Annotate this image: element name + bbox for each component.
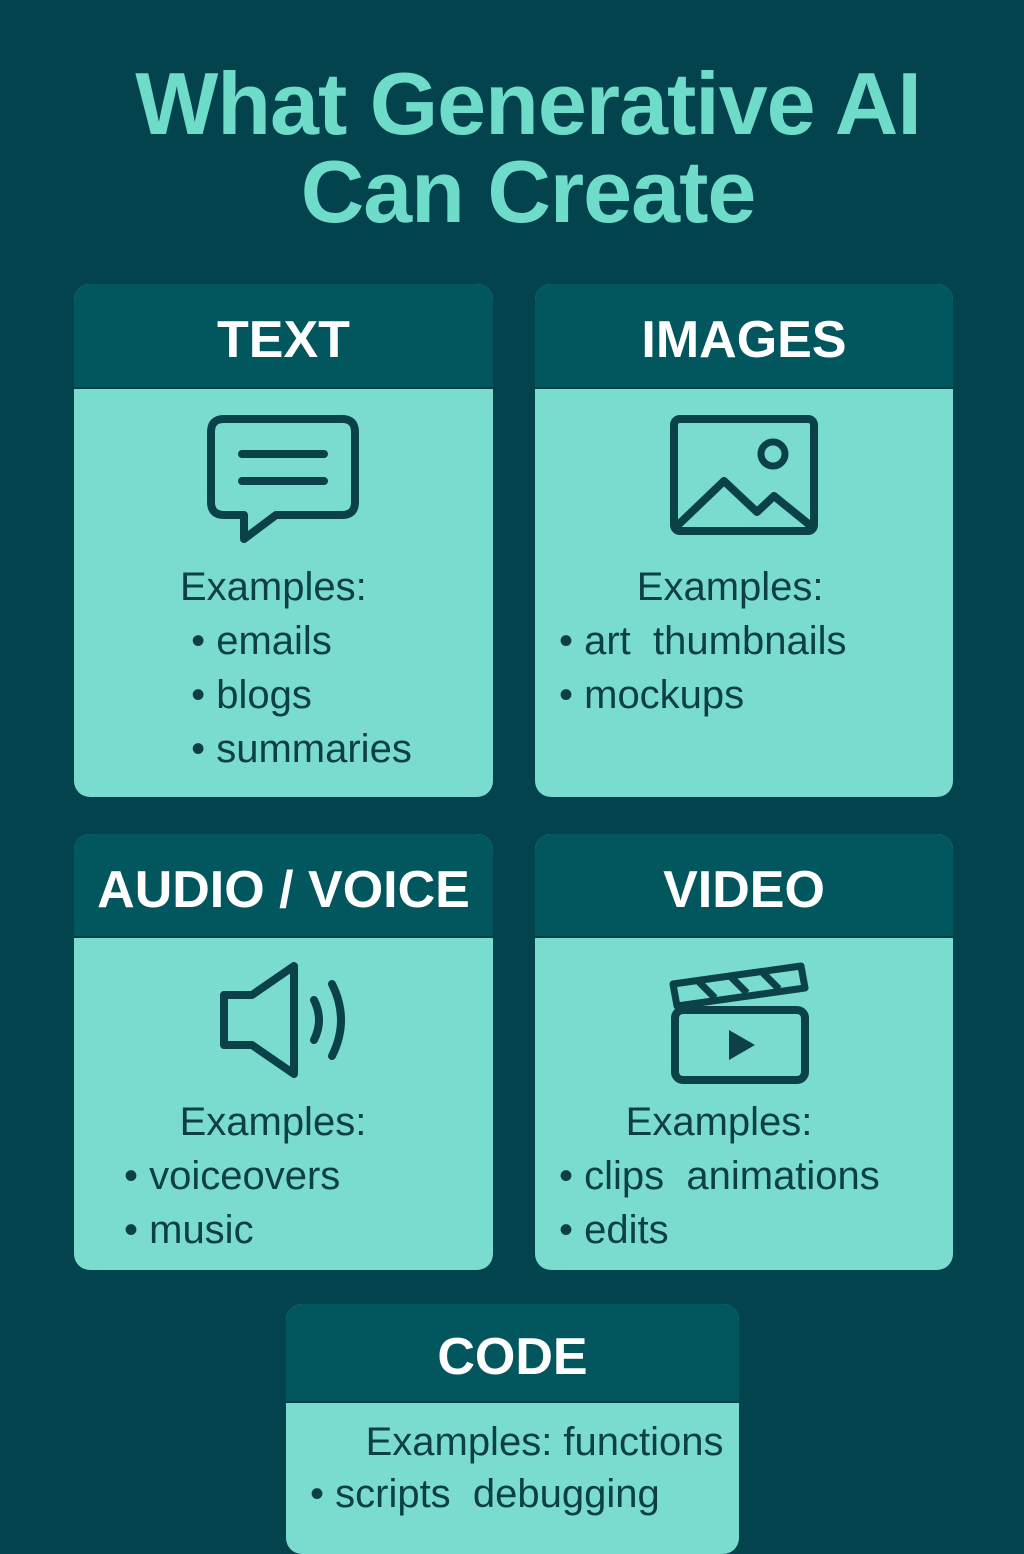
heading: images: IMAGES (641, 311, 847, 369)
icon: chat bubble (207, 415, 359, 543)
heading: audio (74, 834, 493, 938)
text block: examples: • voiceovers (124, 1154, 340, 1198)
panel: video (535, 834, 953, 1270)
heading: text: TEXT (217, 311, 350, 369)
text block: examples: • mockups (559, 673, 744, 717)
panel: code (286, 1304, 739, 1554)
heading: code (286, 1304, 739, 1403)
text block: examples: • blogs (191, 673, 312, 717)
text block: examples: • emails (191, 619, 332, 663)
text block: examples: • clips animations (559, 1154, 880, 1198)
text block: examples: Examples: (180, 565, 367, 609)
text block: examples: Examples: (180, 1100, 366, 1144)
heading: code: CODE (437, 1328, 588, 1386)
text block: examples: Examples: functions (366, 1420, 724, 1464)
title: Can Create (301, 142, 755, 241)
text block: examples (559, 1100, 880, 1252)
panel: images (535, 284, 953, 797)
icon: clapperboard (670, 962, 809, 1084)
title: What Generative AI (135, 54, 921, 153)
text block: examples: • art thumbnails (559, 619, 846, 663)
heading: video (535, 834, 953, 938)
text block: examples: • music (124, 1208, 254, 1252)
text block: examples: Examples: (626, 1100, 812, 1144)
icon: speaker (220, 962, 345, 1078)
panel: audio (74, 834, 493, 1270)
icon: picture (670, 415, 818, 535)
text block: examples: • edits (559, 1208, 669, 1252)
text block: examples (124, 1100, 366, 1252)
text block: examples: • summaries (191, 727, 412, 771)
panel: text (74, 284, 493, 797)
text block: examples: • scripts debugging (310, 1472, 660, 1516)
heading: text (74, 284, 493, 389)
text block: examples (180, 565, 412, 771)
heading: video: VIDEO (663, 861, 825, 919)
heading: images (535, 284, 953, 389)
text block: examples: Examples: (637, 565, 824, 609)
text block: examples (310, 1420, 724, 1516)
heading: audio: AUDIO / VOICE (97, 861, 470, 919)
text block: examples (559, 565, 846, 717)
title (135, 54, 921, 241)
